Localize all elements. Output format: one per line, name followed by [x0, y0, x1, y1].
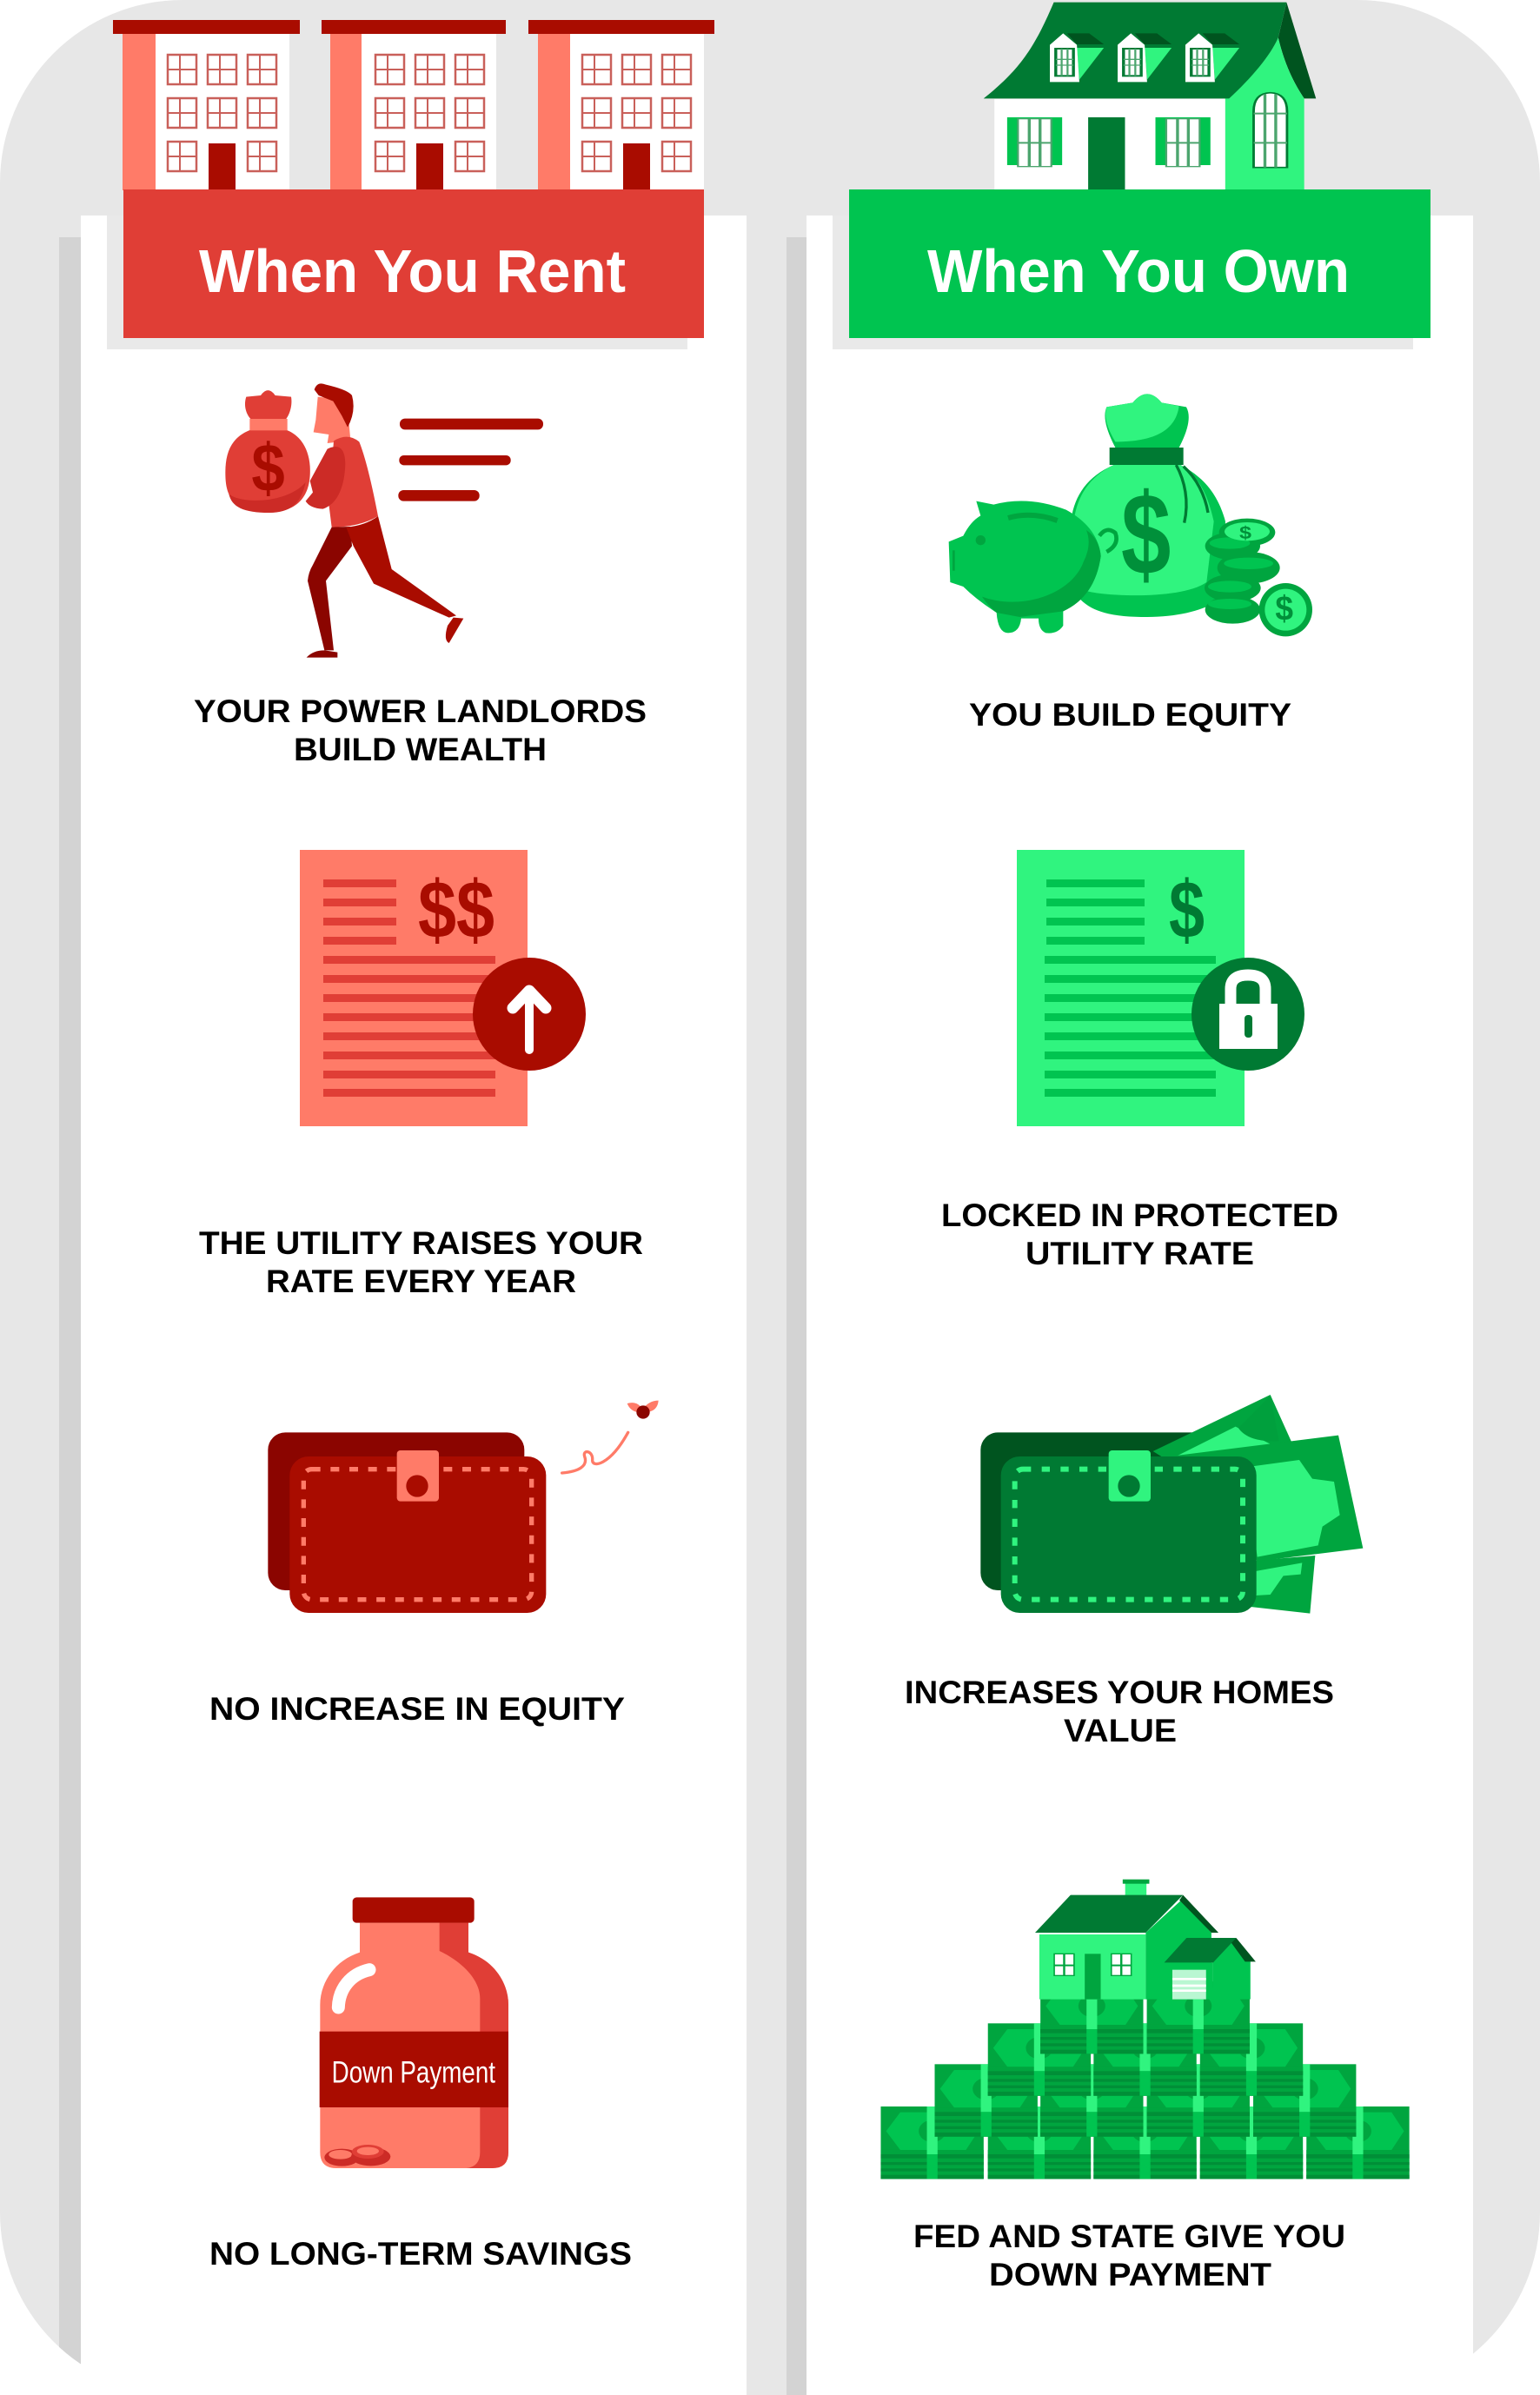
- heading: when you rent: When You Rent: [199, 237, 626, 305]
- icon: bill with locked rate: $: [1169, 864, 1205, 955]
- icon: piggy bank and money bag: $: [1239, 524, 1251, 543]
- panel: when you own: [787, 3, 1473, 2395]
- label: locked in protected utility rate: LOCKED IN PROTECTED: [941, 1198, 1338, 1233]
- icon: jar labelled down payment: Down Payment: [332, 2056, 495, 2090]
- label: no increase in equity: NO INCREASE IN EQUITY: [209, 1691, 625, 1727]
- label: your power landlords build wealth: [194, 693, 647, 767]
- label: the utility raises your rate every year: RATE EVERY YEAR: [266, 1264, 576, 1299]
- icon: jar labelled down payment: [320, 1897, 508, 2168]
- icon: bill with rising rate: $$: [418, 864, 495, 955]
- panel: when you rent: [59, 20, 747, 2395]
- label: increases your homes value: [905, 1675, 1334, 1748]
- icon: piggy bank and money bag: [949, 394, 1312, 636]
- label: the utility raises your rate every year: THE UTILITY RAISES YOUR: [199, 1225, 643, 1261]
- heading: when you own: When You Own: [927, 237, 1350, 305]
- icon: piggy bank and money bag: $: [1275, 589, 1293, 627]
- icon: man carrying money bag: [225, 383, 543, 658]
- label: locked in protected utility rate: [941, 1198, 1338, 1271]
- label: locked in protected utility rate: UTILITY RATE: [1026, 1236, 1254, 1271]
- icon: bill with rising rate: [300, 850, 586, 1126]
- icon: house on pyramid of money: [880, 1880, 1410, 2179]
- heading: when you rent: [123, 189, 704, 338]
- icon: man carrying money bag: $: [251, 429, 285, 506]
- icon: bill with locked rate: [1017, 850, 1304, 1126]
- label: the utility raises your rate every year: [199, 1225, 643, 1299]
- label: you build equity: YOU BUILD EQUITY: [969, 697, 1291, 733]
- icon: apartment buildings: [113, 20, 714, 190]
- icon: empty wallet with fly: [268, 1401, 659, 1613]
- label: your power landlords build wealth: YOUR POWER LANDLORDS: [194, 693, 647, 729]
- label: no long-term savings: NO LONG-TERM SAVINGS: [209, 2236, 632, 2272]
- label: your power landlords build wealth: BUILD WEALTH: [294, 732, 547, 767]
- label: fed and state give you down payment: FED AND STATE GIVE YOU: [913, 2219, 1345, 2254]
- heading: when you own: [849, 189, 1430, 338]
- icon: wallet full of cash: [980, 1395, 1363, 1614]
- icon: family house: [984, 3, 1316, 189]
- label: fed and state give you down payment: [913, 2219, 1345, 2292]
- label: increases your homes value: INCREASES YOUR HOMES: [905, 1675, 1334, 1710]
- icon: piggy bank and money bag: $: [1121, 470, 1171, 600]
- label: fed and state give you down payment: DOWN PAYMENT: [989, 2257, 1271, 2292]
- label: increases your homes value: VALUE: [1064, 1713, 1177, 1748]
